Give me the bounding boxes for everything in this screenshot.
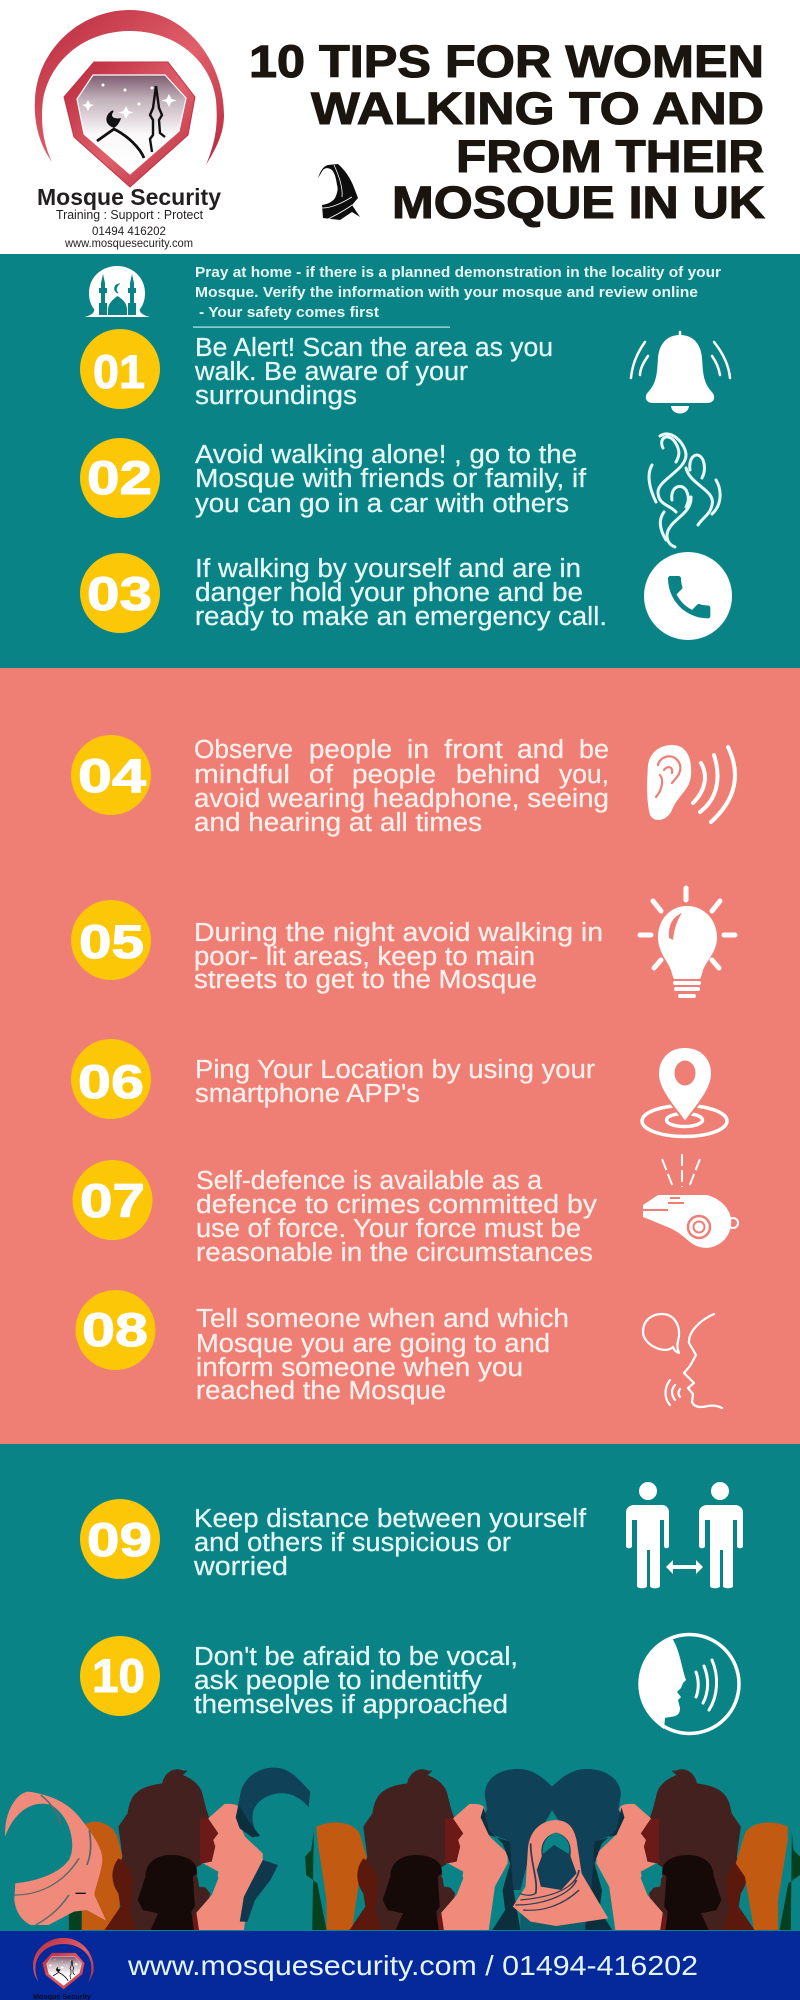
icon: phone: [644, 552, 732, 640]
tip 10 text: ask people to indentitfy: [194, 1667, 482, 1695]
tip 08: [76, 1290, 722, 1408]
tip 04 text: people: [352, 761, 436, 789]
title: MOSQUE IN UK: [392, 177, 766, 228]
tip 01 text: walk. Be aware of your: [194, 358, 469, 386]
intro note: Mosque. Verify the information with your mosque and review online: [195, 285, 698, 301]
tip 05: [71, 888, 735, 996]
tip 09 text: worried: [193, 1553, 288, 1581]
intro note: Pray at home - if there is a planned demonstration in the locality of your: [195, 265, 721, 281]
tip 04 text: people: [309, 736, 392, 764]
tip 04 text: Observe: [194, 736, 293, 764]
tip 10 text: [194, 1643, 518, 1719]
tip 01 text: Be Alert! Scan the area as you: [195, 334, 553, 362]
badge 10: [80, 1636, 160, 1716]
icon: light bulb: [640, 888, 735, 996]
tip 04 text: front: [444, 736, 503, 764]
badge 10: 10: [92, 1649, 145, 1702]
badge 08: 08: [82, 1303, 148, 1356]
tip 09 text: and others if suspicious or: [194, 1529, 512, 1557]
orange and green figure right: [736, 1822, 800, 1930]
panel: bottom teal section: [0, 1444, 800, 1931]
badge 01: 01: [93, 345, 145, 398]
badge 04: [71, 735, 151, 815]
orange figure left: [82, 1822, 123, 1930]
logo: Mosque Security: [35, 10, 224, 250]
woman group centre-right: [596, 1769, 755, 1930]
tip 04 text: behind: [456, 761, 540, 789]
tip 04 text: and: [517, 736, 564, 764]
tip 02 text: you can go in a car with others: [195, 490, 569, 518]
tip 04 text: and hearing at all times: [194, 809, 482, 837]
badge 06: [71, 1039, 151, 1119]
tip 06 text: Ping Your Location by using your: [195, 1056, 596, 1084]
panel: top teal section: [0, 254, 800, 668]
tip 06 text: smartphone APP's: [195, 1080, 420, 1108]
header panel: [0, 0, 800, 254]
tip 07: [72, 1154, 738, 1267]
logo mark: [35, 10, 224, 187]
tip 10 text: Don't be afraid to be vocal,: [194, 1643, 518, 1671]
title: FROM THEIR: [456, 131, 764, 182]
logo tagline: Training : Support : Protect: [56, 207, 203, 222]
tip 08 text: Mosque you are going to and: [196, 1330, 550, 1358]
icon: location pin: [642, 1047, 727, 1136]
title: 10 TIPS FOR WOMEN: [249, 36, 764, 87]
tip 04 text: of: [309, 761, 334, 789]
tip 08 text: [196, 1305, 569, 1405]
tip 04 text: in: [407, 736, 429, 764]
badge 07: [72, 1160, 152, 1240]
tip 02: [80, 434, 720, 547]
tip 03 text: danger hold your phone and be: [195, 579, 583, 607]
tip 07 text: reasonable in the circumstances: [196, 1239, 593, 1267]
green figure left: [69, 1910, 82, 1930]
badge 04: 04: [78, 749, 146, 802]
badge 08: [76, 1290, 156, 1370]
tip 09: [80, 1482, 743, 1588]
tip 05 text: poor- lit areas, keep to main: [194, 943, 535, 971]
tip 04 text: mindful: [194, 761, 290, 789]
tip 10: [80, 1634, 739, 1734]
logo phone: 01494 416202: [92, 224, 166, 238]
title: WALKING TO AND: [311, 83, 764, 134]
scarf woman left: [5, 1792, 106, 1925]
icon: hijab head: [318, 164, 360, 220]
panel: coral section: [0, 668, 800, 1444]
blue-haired figure: [236, 1768, 310, 1922]
tip 06: [71, 1039, 727, 1136]
badge 03: 03: [87, 567, 152, 620]
tip 09 text: Keep distance between yourself: [194, 1505, 587, 1533]
tip 04 text: avoid wearing headphone, seeing: [194, 785, 609, 813]
tip 09 text: [193, 1505, 587, 1581]
tip 03 text: [195, 555, 607, 631]
intro note: [193, 265, 721, 328]
footer logo: [33, 1938, 94, 2000]
badge 03: [80, 553, 160, 633]
icon: two people with distance arrow: [626, 1482, 743, 1588]
tip 05 text: During the night avoid walking in: [194, 919, 603, 947]
icon: whistle: [643, 1154, 738, 1248]
icon: talking face: [643, 1314, 722, 1408]
tip 07 text: [196, 1167, 597, 1267]
tip 03: [80, 552, 732, 640]
logo name: Mosque Security: [37, 184, 221, 210]
tip 05 text: streets to get to the Mosque: [194, 966, 537, 994]
tip 02 text: Avoid walking alone! , go to the: [195, 441, 577, 469]
tip 07 text: Self-defence is available as a: [196, 1167, 543, 1195]
icon: smoke figures: [649, 434, 720, 547]
tip 03 text: If walking by yourself and are in: [195, 555, 581, 583]
woman group A: [105, 1769, 263, 1930]
icon: speaking face in circle: [640, 1634, 739, 1734]
tip 01 text: [194, 334, 553, 410]
title: [249, 36, 766, 228]
logo website: www.mosquesecurity.com: [64, 238, 193, 250]
tip 02 text: [195, 441, 587, 518]
tip 04 text: be: [579, 736, 609, 764]
tip 01: [80, 329, 730, 414]
blue heads centre: [481, 1769, 624, 1930]
badge 05: [71, 900, 151, 980]
tip 01 text: surroundings: [195, 382, 357, 410]
badge 01: [80, 329, 160, 409]
footer bar: [0, 1931, 800, 2000]
tip 04 text: [194, 736, 609, 837]
woman group centre-left: [349, 1769, 508, 1930]
tip 05 text: [194, 919, 603, 994]
icon: ear with sound waves: [647, 745, 735, 822]
tip 03 text: ready to make an emergency call.: [195, 603, 607, 631]
badge 02: [80, 438, 160, 518]
tip 10 text: themselves if approached: [194, 1691, 508, 1719]
tip 04: [71, 735, 735, 837]
tip 04 text: you,: [559, 761, 609, 789]
tip 07 text: defence to crimes committed by: [196, 1191, 597, 1219]
tip 08 text: inform someone when you: [196, 1354, 523, 1382]
icon: bell: [631, 332, 730, 414]
tip 02 text: Mosque with friends or family, if: [195, 465, 587, 493]
intro note: - Your safety comes first: [199, 305, 379, 321]
icon: mosque: [85, 266, 150, 317]
tip 06 text: [195, 1056, 596, 1108]
hijab woman centre: [513, 1820, 608, 1926]
tip 07 text: use of force. Your force must be: [196, 1215, 581, 1243]
badge 09: [80, 1499, 160, 1579]
badge 05: 05: [79, 915, 144, 968]
tip 08 text: Tell someone when and which: [196, 1305, 569, 1333]
tip 08 text: reached the Mosque: [196, 1377, 446, 1405]
badge 07: 07: [80, 1174, 145, 1227]
footer contact line: www.mosquesecurity.com / 01494-416202: [127, 1950, 698, 1981]
badge 09: 09: [87, 1513, 152, 1566]
orange and green figure centre: [305, 1822, 368, 1930]
badge 06: 06: [78, 1055, 144, 1108]
illustration: silhouettes of women: [5, 1768, 800, 1930]
badge 02: 02: [87, 451, 152, 504]
